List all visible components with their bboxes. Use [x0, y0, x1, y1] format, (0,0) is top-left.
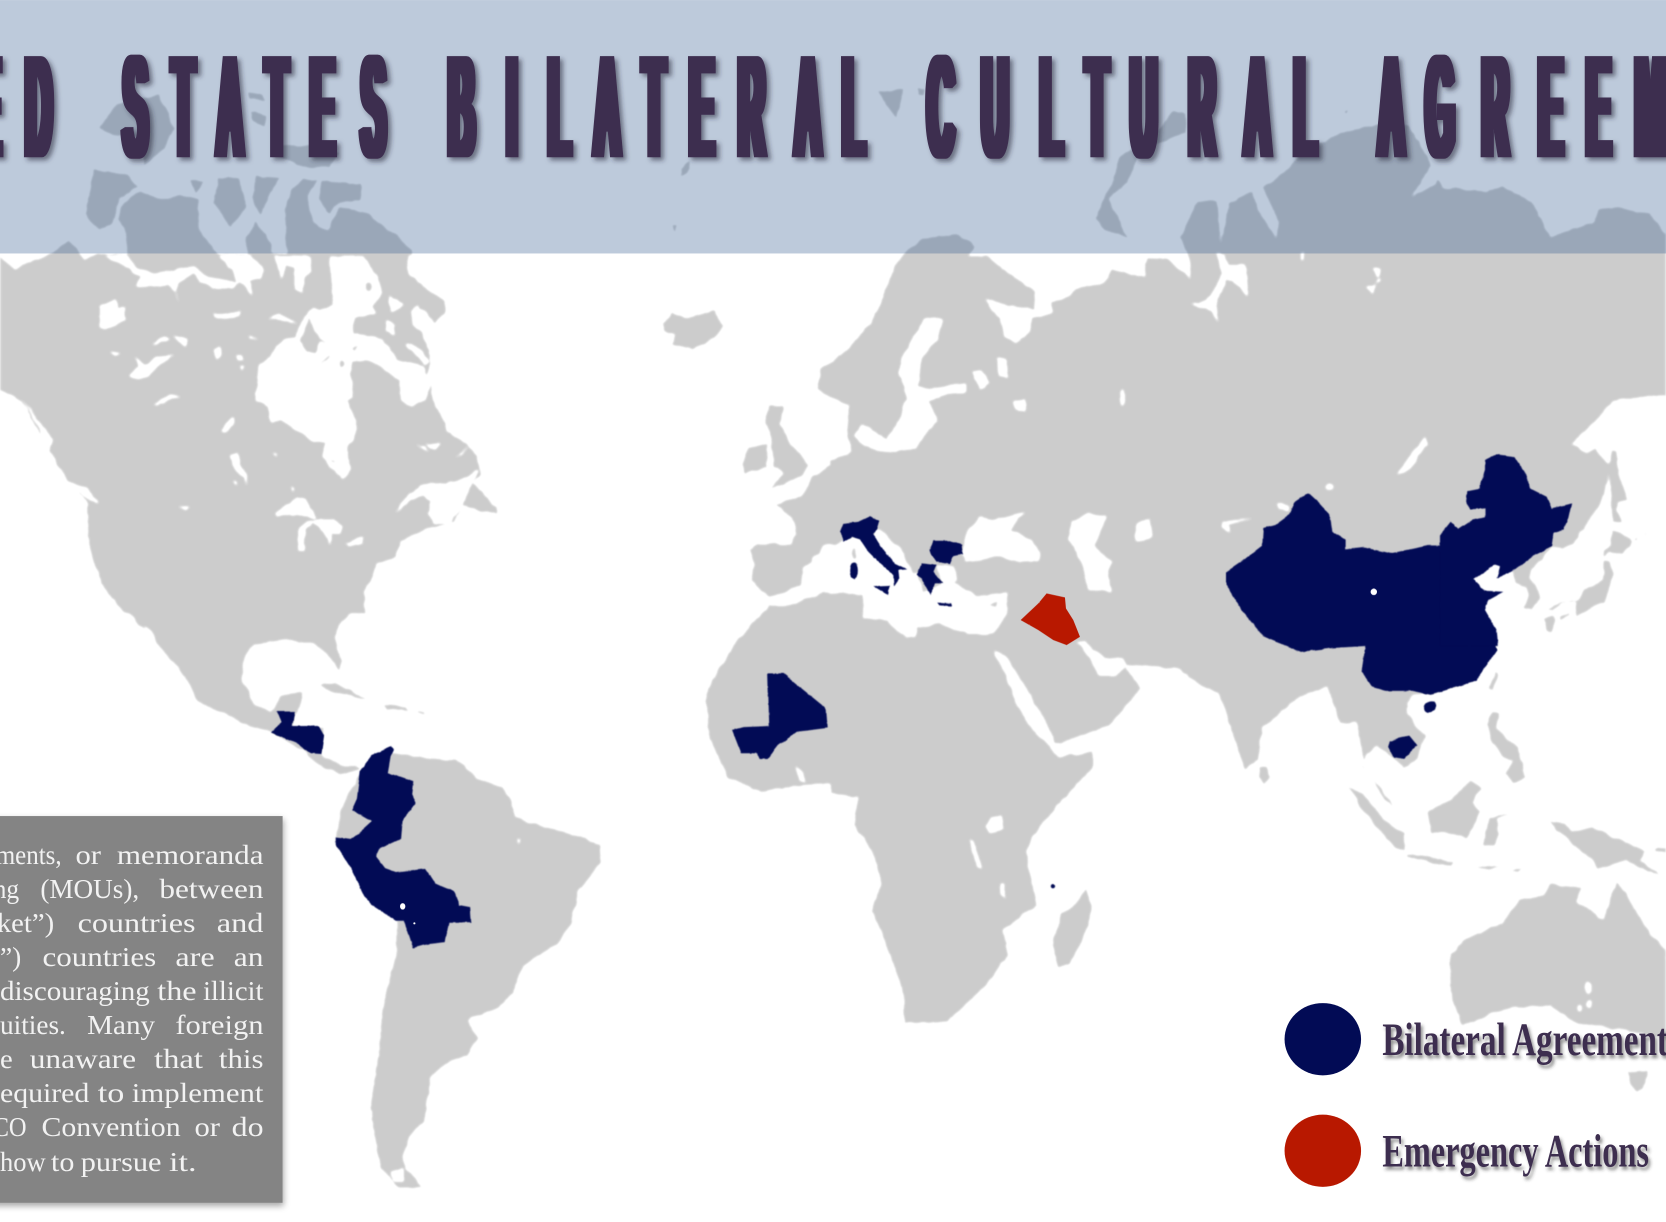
- Iraq in red: [1021, 593, 1080, 645]
- legend: [1285, 1003, 1666, 1187]
- Crete: [937, 602, 953, 606]
- paragraph text: how: [0, 1146, 46, 1177]
- paragraph text: between: [159, 873, 264, 904]
- land: Africa, Middle East, South and Southeast Asia, Australia: [830, 609, 1666, 1092]
- China west and south: [1226, 493, 1497, 695]
- water: Mediterranean and Black Sea: [770, 512, 1040, 637]
- Greece: [917, 563, 943, 595]
- text panel: description of bilateral agreements: [0, 816, 283, 1203]
- paragraph text: to: [98, 1077, 124, 1108]
- paragraph text: or: [194, 1111, 220, 1142]
- land: Eurasia north: [817, 88, 1666, 614]
- paragraph text: it.: [169, 1146, 197, 1177]
- land: Central America, South America, West Africa: [125, 609, 837, 1188]
- land: islands inside Hudson Bay and Foxe Basin: [299, 282, 447, 495]
- water: Gulf of California, Lake Volta, Amazon mouth: [143, 627, 805, 1182]
- paragraph text: Many: [87, 1009, 155, 1040]
- paragraph text: countries: [42, 941, 156, 972]
- water: Red Sea, Persian Gulf, African lakes: [970, 642, 1591, 1012]
- water: Hudson Bay, Canadian channels, Great Lakes: [100, 255, 478, 550]
- paragraph text: unaware: [30, 1043, 136, 1074]
- paragraph text: discouraging: [0, 975, 150, 1006]
- paragraph text: are: [175, 941, 215, 972]
- paragraph text: to: [51, 1146, 74, 1177]
- paragraph text: Convention: [41, 1111, 181, 1142]
- paragraph text: (MOUs),: [40, 873, 139, 904]
- land: Sakhalin, Kurils and Japan: [1543, 449, 1661, 632]
- paragraph text: foreign: [175, 1009, 264, 1040]
- paragraph text: illicit: [203, 975, 264, 1006]
- paragraph text: an: [234, 941, 264, 972]
- land: North America and Europe, north-west: [0, 92, 837, 614]
- paragraph text: implement: [132, 1077, 264, 1108]
- paragraph text: ”): [0, 941, 21, 972]
- paragraph text: [0, 839, 264, 1177]
- Colombia, Peru, Bolivia: [336, 747, 471, 948]
- paragraph text: do: [232, 1111, 264, 1142]
- water: west coast inlets: [21, 399, 98, 505]
- paragraph text: and: [217, 907, 264, 938]
- Guatemala, Honduras, El Salvador: [271, 712, 324, 754]
- paragraph text: e: [0, 1043, 13, 1074]
- water: Baltic, Caspian, Aral, Baikal and other inland seas: [854, 164, 1444, 592]
- paragraph text: that: [154, 1043, 203, 1074]
- Mali: [732, 673, 828, 759]
- Italy: [840, 516, 907, 586]
- paragraph text: or: [75, 839, 101, 870]
- small islands: [1051, 884, 1055, 888]
- bilateral agreement countries in navy: [271, 454, 1572, 948]
- Sicily: [873, 585, 889, 595]
- Bulgaria: [930, 541, 963, 564]
- header band: [0, 0, 1666, 253]
- paragraph text: pursue: [81, 1146, 162, 1177]
- Cambodia: [1388, 736, 1417, 759]
- China north-east: [1440, 454, 1572, 646]
- paragraph text: the: [157, 975, 197, 1006]
- lakes inside navy countries: [400, 589, 1377, 924]
- land: northern Africa edge: [765, 590, 866, 613]
- paragraph text: uities.: [0, 1009, 66, 1040]
- paragraph text: this: [219, 1043, 264, 1074]
- paragraph text: memoranda: [117, 839, 264, 870]
- Sardinia: [850, 563, 858, 579]
- legend swatch: bilateral agreements: [1285, 1003, 1361, 1075]
- paragraph text: equired: [0, 1077, 89, 1108]
- legend swatch: emergency actions: [1285, 1115, 1361, 1187]
- paragraph text: countries: [78, 907, 196, 938]
- Hainan: [1421, 699, 1439, 715]
